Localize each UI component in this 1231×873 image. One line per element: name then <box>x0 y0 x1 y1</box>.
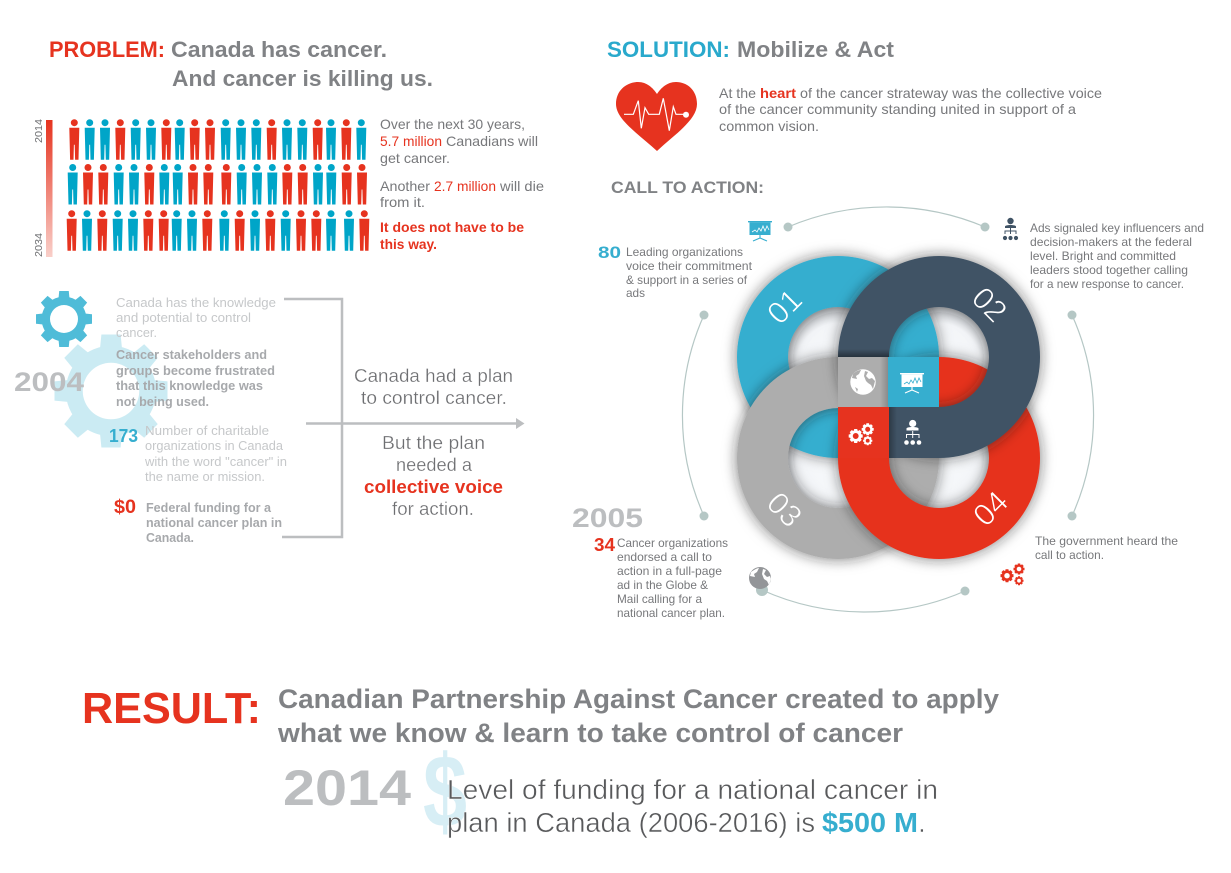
result heading: RESULT: <box>82 684 261 733</box>
text: government heard: The government heard the <box>1035 534 1178 548</box>
text: 34 cancer organizations: action in a full-page <box>617 564 722 578</box>
icon: pale dollar sign: $ <box>423 734 467 849</box>
text: government heard <box>1035 534 1178 562</box>
text: plan needed a collective voice: collective voice <box>364 477 503 497</box>
connector arcs around rings <box>682 207 1094 612</box>
ring numbers: 02 <box>965 280 1014 329</box>
text: problem statistics: Another <box>380 178 430 194</box>
problem heading: PROBLEM: <box>49 37 165 62</box>
text: problem statistics: 5.7 million <box>380 133 442 149</box>
text: problem statistics: from it. <box>380 194 425 210</box>
year 2004: 2004 <box>14 367 84 397</box>
text: problem statistics: will die <box>499 178 544 194</box>
interlocking rings diagram <box>737 256 1040 559</box>
text: problem statistics: get cancer. <box>380 150 450 166</box>
text: problem statistics: It does not have to be <box>380 219 524 235</box>
arrow <box>306 418 524 429</box>
text: 34 cancer organizations: Mail calling for a <box>617 592 702 606</box>
text: ads signaled key influencers: decision-makers at the federal <box>1030 235 1192 249</box>
text: plan needed a collective voice: to control cancer. <box>361 388 507 408</box>
ring 01 <box>737 256 939 458</box>
stat: 173 charitable organizations: with the word "cancer" in <box>144 455 287 469</box>
stat: $0 federal funding: national cancer plan in <box>146 516 282 530</box>
text: government heard: call to action. <box>1035 548 1104 562</box>
icon: presentation screen blue <box>748 221 772 241</box>
text: 80 leading organizations: & support in a series of <box>626 273 748 287</box>
text: heart of the strategy: common vision. <box>719 118 819 134</box>
result statement: Canadian Partnership Against Cancer created to apply <box>278 684 999 714</box>
text: level of funding <box>447 774 938 838</box>
icon: gears <box>849 423 874 445</box>
problem heading: And cancer is killing us. <box>172 66 433 91</box>
text: knowledge and frustration: and potential to control <box>116 311 251 325</box>
result statement <box>277 684 999 748</box>
ring 04 <box>838 357 1040 559</box>
stat: 173 charitable organizations: Number of charitable <box>145 424 269 438</box>
text: 34 cancer organizations: ad in the Globe & <box>617 578 708 592</box>
icon: hierarchy dark <box>1003 218 1018 240</box>
icon: presentation screen <box>900 373 924 393</box>
timeline bar 2014 to 2034: 2014 <box>33 119 45 143</box>
solution heading: SOLUTION: <box>607 37 730 62</box>
icon: large pale gear <box>54 334 168 448</box>
text: problem statistics: Canadians will <box>446 133 538 149</box>
text: knowledge and frustration: Canada has the knowledge <box>116 296 276 310</box>
stat: 173 charitable organizations <box>109 424 287 484</box>
icon: globe gray <box>749 567 771 589</box>
text: 80 leading organizations: voice their commitment <box>626 259 753 273</box>
stat: $0 federal funding: Federal funding for a <box>146 501 272 515</box>
year 2014: 2014 <box>283 760 411 816</box>
problem heading: Canada has cancer. <box>171 37 387 62</box>
timeline bar 2014 to 2034 <box>33 119 52 257</box>
centre cell: blue <box>888 357 939 408</box>
stat: $0 federal funding <box>114 497 282 545</box>
text: plan needed a collective voice: But the plan <box>382 433 485 453</box>
ring 03 <box>737 357 939 559</box>
text: problem statistics: 2.7 million <box>434 178 496 194</box>
stat: 173 charitable organizations: the name or mission. <box>145 470 265 484</box>
ring numbers: 01 <box>760 282 809 331</box>
text: ads signaled key influencers: leaders stood together calling <box>1030 263 1188 277</box>
centre cell: red <box>838 407 889 458</box>
text: heart of the strategy: heart <box>760 85 796 101</box>
centre cell: dark <box>889 407 939 458</box>
stat: $0 federal funding: $0 <box>114 497 136 518</box>
text: ads signaled key influencers: Ads signaled key influencers and <box>1030 221 1204 235</box>
text: 34 cancer organizations: national cancer plan. <box>617 606 725 620</box>
text: problem statistics <box>380 116 544 252</box>
solution heading: Mobilize & Act <box>737 37 895 62</box>
stat: $0 federal funding: Canada. <box>146 531 194 545</box>
text: ads signaled key influencers: level. Bright and committed <box>1030 249 1176 263</box>
call to action heading: CALL TO ACTION: <box>611 178 764 197</box>
timeline bar 2014 to 2034: 2034 <box>33 233 45 257</box>
text: heart of the strategy: At the <box>719 85 756 101</box>
text: 80 leading organizations <box>598 243 753 300</box>
ring 02 <box>838 256 1040 458</box>
bracket <box>282 299 342 537</box>
text: 80 leading organizations: Leading organizations <box>626 245 743 259</box>
text: level of funding: plan in Canada (2006-2016) is <box>447 807 815 838</box>
text: problem statistics: this way. <box>380 236 437 252</box>
text: 34 cancer organizations: endorsed a call to <box>617 550 712 564</box>
ring numbers <box>760 280 1015 534</box>
text: knowledge and frustration: that this knowledge was <box>116 379 263 393</box>
text: 34 cancer organizations <box>594 535 728 620</box>
icon: globe <box>850 369 876 395</box>
text: 34 cancer organizations: Cancer organizations <box>617 536 728 550</box>
text: ads signaled key influencers: for a new response to cancer. <box>1030 277 1184 291</box>
text: knowledge and frustration <box>116 296 276 409</box>
stat: 173 charitable organizations: organizations in Canada <box>145 439 283 453</box>
problem heading <box>49 37 433 91</box>
stat: 173 charitable organizations: 173 <box>109 426 138 446</box>
result statement: what we know & learn to take control of cancer <box>277 718 904 748</box>
text: knowledge and frustration: Cancer stakeholders and <box>116 348 267 362</box>
text: knowledge and frustration: groups become frustrated <box>116 364 275 378</box>
year 2005: 2005 <box>572 503 643 533</box>
text: heart of the strategy: of the cancer strateway was the collective voice <box>800 85 1102 101</box>
ring numbers: 03 <box>760 485 809 534</box>
pictogram: rows of people <box>67 119 369 251</box>
text: 80 leading organizations: 80 <box>598 243 621 262</box>
centre cell: gray <box>838 357 889 408</box>
solution heading <box>607 37 895 62</box>
text: heart of the strategy: of the cancer community standing united in support of a <box>719 101 1076 117</box>
ring numbers: 04 <box>966 484 1015 533</box>
icon: small gear <box>36 291 92 347</box>
text: plan needed a collective voice: for action. <box>392 499 474 519</box>
text: plan needed a collective voice <box>354 366 513 519</box>
text: problem statistics: Over the next 30 years, <box>380 116 525 132</box>
text: plan needed a collective voice: Canada had a plan <box>354 366 513 386</box>
text: knowledge and frustration: not being used. <box>116 395 209 409</box>
text: ads signaled key influencers <box>1030 221 1204 291</box>
icon: heart with pulse <box>616 82 697 151</box>
icon: gears red <box>1000 564 1024 585</box>
text: level of funding: Level of funding for a national cancer in <box>447 774 938 805</box>
text: 34 cancer organizations: 34 <box>594 535 615 555</box>
text: level of funding: . <box>918 807 926 838</box>
text: knowledge and frustration: cancer. <box>116 326 157 340</box>
text: level of funding: $500 M <box>822 807 918 838</box>
text: heart of the strategy <box>719 85 1102 134</box>
text: plan needed a collective voice: needed a <box>396 455 473 475</box>
text: 80 leading organizations: ads <box>626 286 645 300</box>
icon: hierarchy <box>904 420 921 445</box>
